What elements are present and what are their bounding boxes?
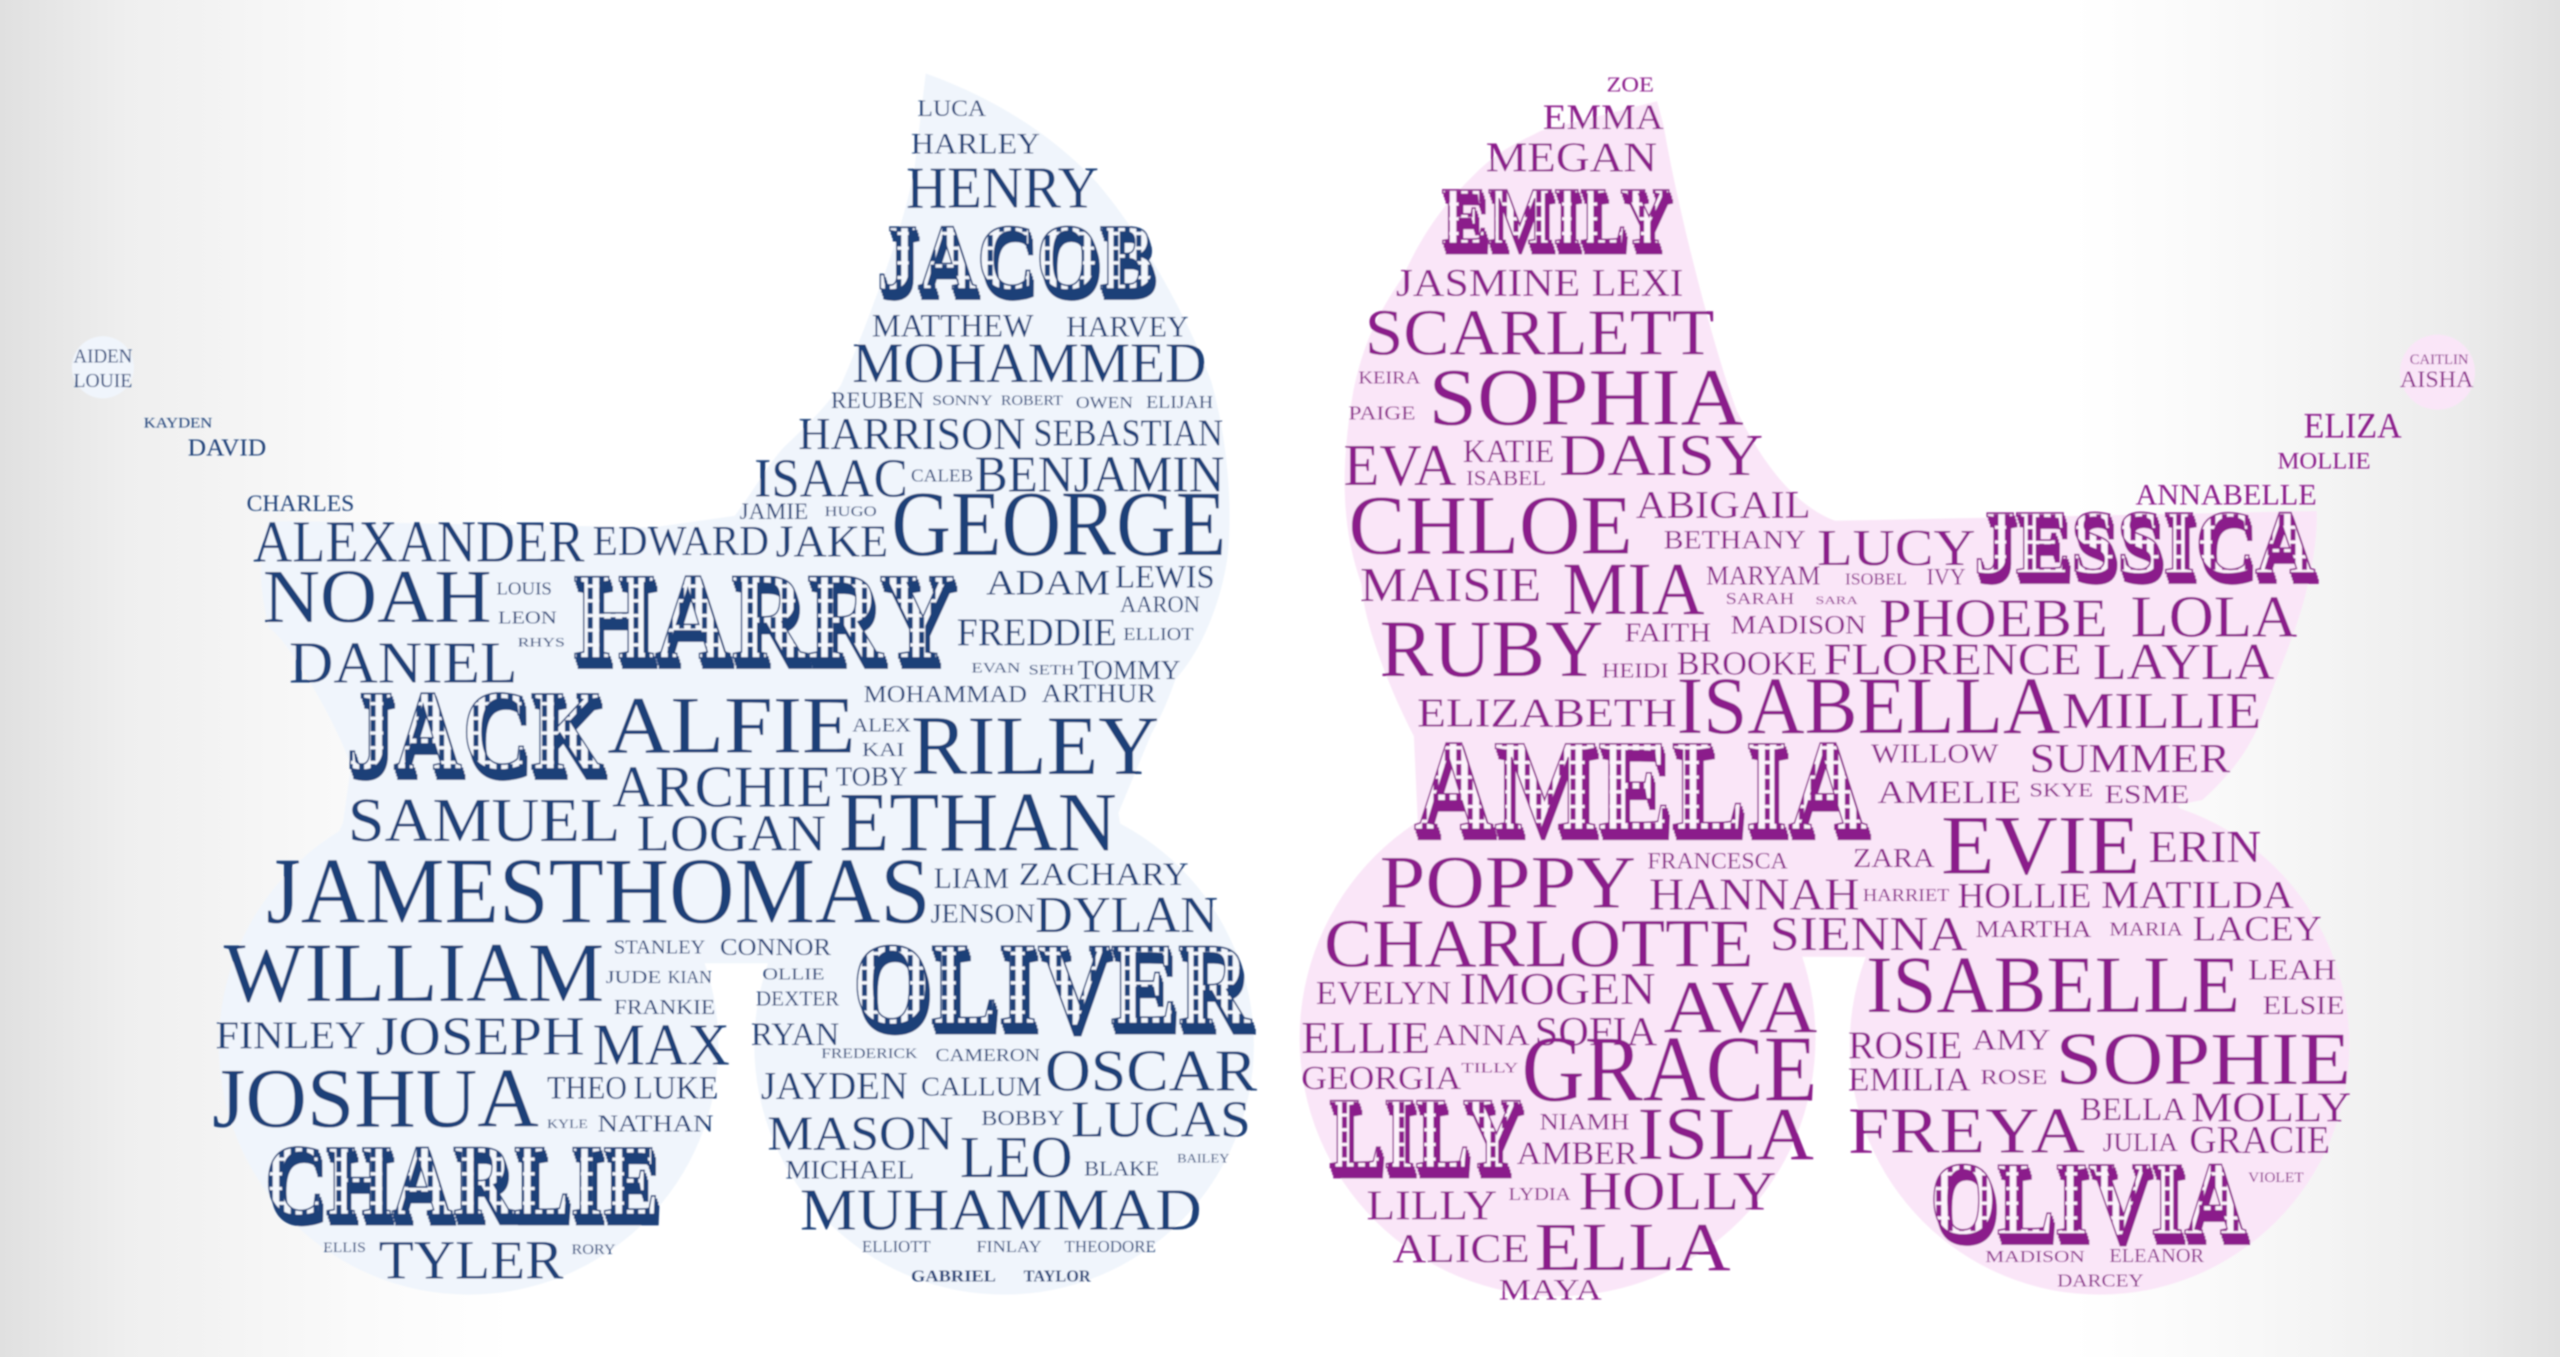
word cloud: girls names: ISABEL xyxy=(1466,466,1546,490)
word cloud: boys names: HARLEY xyxy=(911,128,1040,160)
word cloud: girls names: ELLA xyxy=(1535,1209,1731,1285)
word cloud: girls names: MARIA xyxy=(2109,919,2183,940)
word cloud: boys names: SAMUEL xyxy=(348,787,620,855)
word cloud: girls names: FLORENCE xyxy=(1824,633,2082,684)
word cloud: girls names: ERIN xyxy=(2149,821,2261,872)
word cloud: girls names: ISABELLA xyxy=(1677,660,2060,751)
ornamental boys names: HARRY xyxy=(573,547,955,685)
ornamental girls names: JESSICA xyxy=(1974,492,2315,593)
word cloud: girls names: ELEANOR xyxy=(2109,1246,2205,1267)
word cloud: girls names: FRANCESCA xyxy=(1647,849,1788,874)
word cloud: boys names: KYLE xyxy=(547,1116,588,1131)
word cloud: girls names: IMOGEN xyxy=(1460,963,1655,1014)
panel: boys pram silhouette xyxy=(72,73,1254,1295)
word cloud: boys names: KIAN xyxy=(668,967,712,987)
ornamental boys names: JACK xyxy=(346,667,604,794)
word cloud: girls names: ZARA xyxy=(1853,843,1935,874)
word cloud: girls names: FAITH xyxy=(1624,618,1711,649)
word cloud: boys names: OWEN xyxy=(1076,393,1133,412)
word cloud: boys names: RHYS xyxy=(518,635,565,650)
word cloud: girls names: ISOBEL xyxy=(1845,569,1907,588)
word cloud: boys names: ADAM xyxy=(986,562,1110,602)
word cloud: boys names: GABRIEL xyxy=(911,1267,996,1286)
word cloud: boys names: FINLEY xyxy=(216,1014,366,1057)
word cloud: boys names: FREDERICK xyxy=(821,1046,918,1062)
word cloud: girls names: LOLA xyxy=(2131,585,2298,650)
word cloud: boys names: NATHAN xyxy=(598,1110,714,1137)
word cloud: girls names: GEORGIA xyxy=(1301,1059,1461,1097)
word cloud: boys names: SONNY xyxy=(932,393,993,409)
word cloud: girls names: ELIZABETH xyxy=(1417,690,1677,735)
word cloud: boys names: HARVEY xyxy=(1066,311,1189,343)
word cloud: boys names: LIAM xyxy=(934,863,1009,895)
word cloud: girls names: GRACE xyxy=(1522,1017,1817,1121)
word cloud: boys names: CALLUM xyxy=(921,1071,1042,1102)
word cloud: boys names: AIDEN xyxy=(74,346,132,367)
word cloud: girls names: CAITLIN xyxy=(2410,352,2469,368)
word cloud: boys names: ALEXANDER xyxy=(253,510,585,575)
word cloud: boys names: THEODORE xyxy=(1064,1237,1156,1256)
word cloud: girls names: ABIGAIL xyxy=(1636,484,1811,527)
word cloud: boys names: CHARLES xyxy=(247,491,354,516)
word cloud: girls names: MADISON xyxy=(1731,610,1866,639)
word cloud: girls names: SARAH xyxy=(1726,589,1795,608)
word cloud: girls names: MILLIE xyxy=(2062,682,2261,740)
word cloud: girls names: DAISY xyxy=(1559,423,1763,488)
word cloud: girls names: NIAMH xyxy=(1540,1110,1629,1135)
word cloud: girls names: ELIZA xyxy=(2304,406,2402,446)
word cloud: girls names: HANNAH xyxy=(1649,868,1860,919)
word cloud: girls names: POPPY xyxy=(1380,842,1636,925)
word cloud: girls names: MATILDA xyxy=(2101,874,2294,917)
word cloud: boys names: ELLIOT xyxy=(1123,624,1194,644)
word cloud: boys names: DANIEL xyxy=(289,630,518,695)
word cloud: boys names: RILEY xyxy=(911,699,1159,793)
word cloud: boys names: ISAAC xyxy=(754,448,908,509)
word cloud: boys names: LEWIS xyxy=(1115,560,1215,596)
word cloud: girls names: ROSE xyxy=(1980,1065,2047,1089)
word cloud: girls names: AVA xyxy=(1664,966,1817,1049)
word cloud: boys names: JOSHUA xyxy=(212,1051,539,1145)
word cloud: boys names: ROBERT xyxy=(1001,393,1063,409)
word cloud: boys names: HUGO xyxy=(825,504,877,520)
word cloud: boys names: EDWARD xyxy=(593,518,769,565)
word cloud: boys names: JOSEPH xyxy=(376,1007,585,1068)
word cloud: girls names: TILLY xyxy=(1461,1061,1519,1077)
word cloud: boys names: OLLIE xyxy=(762,965,825,984)
word cloud: boys names: MOHAMMAD xyxy=(864,681,1027,708)
word cloud: girls names: ISABELLE xyxy=(1866,939,2240,1030)
word cloud: girls names: GRACIE xyxy=(2189,1119,2330,1162)
word cloud: boys names: HARRISON xyxy=(798,408,1025,459)
word cloud: boys names: SETH xyxy=(1029,662,1075,678)
word cloud: boys names: STANLEY xyxy=(614,937,705,958)
word cloud: boys names: CALEB xyxy=(911,466,973,486)
word cloud: boys names: ZACHARY xyxy=(1019,857,1189,893)
ornamental girls names: LILY xyxy=(1329,1077,1522,1189)
word cloud: girls names: ANNA xyxy=(1433,1017,1530,1052)
word cloud: boys names: ARTHUR xyxy=(1042,679,1157,708)
word cloud: boys names: REUBEN xyxy=(831,388,924,413)
word cloud: boys names: FRANKIE xyxy=(614,995,715,1019)
word cloud: boys names: KAYDEN xyxy=(144,416,213,432)
word cloud: girls names: ROSIE xyxy=(1848,1024,1962,1067)
word cloud: boys names: FINLAY xyxy=(976,1237,1042,1256)
word cloud: boys names: BOBBY xyxy=(981,1106,1064,1130)
word cloud: girls names: ELLIE xyxy=(1301,1012,1430,1063)
ornamental girls names: EMILY xyxy=(1442,170,1670,261)
ornamental boys names xyxy=(265,206,1252,1237)
word cloud: boys names: BAILEY xyxy=(1177,1150,1230,1165)
word cloud: girls names: ESME xyxy=(2104,780,2189,809)
word cloud: girls names: LILLY xyxy=(1367,1183,1497,1230)
word cloud: boys names: ALFIE xyxy=(607,680,856,771)
word cloud: girls names: MIA xyxy=(1562,548,1704,631)
ornamental girls names xyxy=(1329,170,2315,1257)
word cloud: girls names: EVIE xyxy=(1941,798,2140,892)
word cloud: girls names: JASMINE xyxy=(1396,261,1580,304)
word cloud: boys names: LEO xyxy=(960,1125,1073,1190)
word cloud: girls names: PAIGE xyxy=(1349,404,1416,425)
word cloud: boys names: LUKE xyxy=(633,1071,718,1107)
word cloud: boys names: JAKE xyxy=(776,516,888,567)
word cloud: boys names: LOGAN xyxy=(637,805,826,863)
word cloud: girls names: LEAH xyxy=(2248,955,2336,987)
word cloud: girls names: ELSIE xyxy=(2263,991,2344,1020)
ornamental girls names: OLIVIA xyxy=(1930,1141,2246,1257)
word cloud: girls names: EMMA xyxy=(1543,97,1664,137)
word cloud: girls names: SOPHIA xyxy=(1429,351,1744,442)
word cloud: girls names: HEIDI xyxy=(1602,659,1669,683)
word cloud: boys names: MATTHEW xyxy=(872,308,1034,344)
word cloud: girls names: KEIRA xyxy=(1358,368,1420,388)
word cloud: boys names: LOUIS xyxy=(496,578,552,598)
word cloud: girls names: BROOKE xyxy=(1677,644,1817,682)
word cloud: girls names: LAYLA xyxy=(2093,633,2275,691)
word cloud: boys names: CAMERON xyxy=(936,1045,1040,1065)
word cloud: girls names: ZOE xyxy=(1607,72,1654,96)
ornamental boys names: CHARLIE xyxy=(265,1125,660,1237)
word cloud: boys names: JAMES xyxy=(266,839,549,943)
word cloud: girls names: CHLOE xyxy=(1349,478,1633,572)
word cloud: boys names: ELIJAH xyxy=(1146,392,1213,412)
word cloud: girls names: BETHANY xyxy=(1664,526,1806,555)
word cloud: boys names: CONNOR xyxy=(720,934,832,961)
panel: girls pram silhouette xyxy=(1300,101,2475,1296)
word cloud: girls names: LUCY xyxy=(1817,519,1975,577)
word cloud: boys names: FREDDIE xyxy=(957,611,1117,654)
word cloud: girls names: MEGAN xyxy=(1486,134,1657,181)
word cloud: girls names: SOFIA xyxy=(1535,1009,1658,1054)
word cloud: girls names: MADISON xyxy=(1985,1247,2085,1266)
word cloud: boys names: MICHAEL xyxy=(785,1156,914,1185)
word cloud: girls names: SUMMER xyxy=(2029,736,2231,781)
word cloud: girls names: AMY xyxy=(1972,1025,2051,1057)
word cloud: boys names: LEON xyxy=(498,608,557,628)
word cloud: boys names: NOAH xyxy=(263,554,491,639)
word cloud: boys names: LOUIE xyxy=(74,371,132,392)
word cloud: boys names: RYAN xyxy=(751,1017,839,1053)
word cloud: girls names: HOLLY xyxy=(1579,1162,1776,1223)
word cloud: girls names: HARRIET xyxy=(1863,885,1949,905)
word cloud: girls names: SOPHIE xyxy=(2055,1018,2351,1101)
word cloud: boys names: MAX xyxy=(593,1012,730,1077)
word cloud: boys names: GEORGE xyxy=(891,473,1226,576)
word cloud: boys names: MASON xyxy=(767,1105,953,1160)
word cloud: girls names: VIOLET xyxy=(2248,1170,2304,1186)
word cloud: boys names: JUDE xyxy=(606,967,661,987)
word cloud: girls names: SIENNA xyxy=(1770,906,1967,961)
word cloud: girls names: MOLLY xyxy=(2191,1085,2351,1132)
word cloud: girls names: HOLLIE xyxy=(1958,876,2091,916)
ornamental boys names: OLIVER xyxy=(852,920,1252,1050)
word cloud: boys names: HENRY xyxy=(906,155,1099,220)
word cloud: boys names: ELLIS xyxy=(323,1240,366,1256)
word cloud: boys names: LUCAS xyxy=(1071,1090,1251,1148)
word cloud: girls names: JULIA xyxy=(2103,1128,2178,1157)
word cloud: girls names: PHOEBE xyxy=(1879,589,2108,650)
word cloud: girls names: CHARLOTTE xyxy=(1324,905,1753,981)
word cloud: boys names: BLAKE xyxy=(1084,1156,1159,1180)
word cloud: boys names: BENJAMIN xyxy=(975,445,1224,503)
word cloud: girls names: MARTHA xyxy=(1975,916,2092,943)
word cloud: boys names: ARCHIE xyxy=(612,754,833,819)
word cloud: girls names: RUBY xyxy=(1380,603,1603,694)
word cloud: girls names: SARA xyxy=(1815,595,1859,607)
word cloud: girls names: ISLA xyxy=(1638,1093,1814,1176)
word cloud: boys names: MOHAMMED xyxy=(852,332,1207,395)
word cloud: girls names: LACEY xyxy=(2193,908,2322,948)
word cloud: boys names: DEXTER xyxy=(756,987,840,1011)
word cloud: girls names: SCARLETT xyxy=(1365,297,1714,369)
word cloud: boys names: JAMIE xyxy=(740,499,808,524)
word cloud: boys names: RORY xyxy=(571,1242,616,1258)
word cloud: girls names: ALICE xyxy=(1393,1226,1530,1271)
word cloud: girls names: AMBER xyxy=(1517,1136,1638,1172)
word cloud: boys names: TAYLOR xyxy=(1024,1267,1091,1286)
word cloud: boys names: JENSON xyxy=(931,898,1035,929)
word cloud: girls names: LEXI xyxy=(1592,261,1683,304)
word cloud: girls names: EVA xyxy=(1344,433,1457,498)
word cloud: boys names: ETHAN xyxy=(839,776,1117,870)
word cloud: girls names: MAISIE xyxy=(1360,557,1541,612)
ornamental girls names: AMELIA xyxy=(1414,714,1868,858)
word cloud: boys names: DAVID xyxy=(188,434,266,461)
word cloud: boys names: WILLIAM xyxy=(224,926,604,1020)
word cloud: boys names: THOMAS xyxy=(549,839,931,943)
ornamental boys names: JACOB xyxy=(877,206,1154,310)
word cloud: girls names: MARYAM xyxy=(1706,560,1820,591)
word cloud: girls names: SKYE xyxy=(2029,781,2093,802)
word cloud: boys names: DYLAN xyxy=(1035,886,1218,944)
word cloud: girls names: IVY xyxy=(1927,564,1966,589)
word cloud: girls names xyxy=(1301,72,2474,1307)
word cloud: girls names: WILLOW xyxy=(1871,738,1999,769)
word cloud: boys names: TYLER xyxy=(379,1230,563,1291)
word cloud: girls names: BELLA xyxy=(2080,1092,2186,1128)
word cloud: boys names: AARON xyxy=(1120,592,1200,617)
word cloud: girls names: DARCEY xyxy=(2057,1270,2144,1290)
word cloud: girls names: MAYA xyxy=(1499,1275,1602,1307)
word cloud: boys names: THEO xyxy=(547,1071,627,1107)
word cloud: boys names xyxy=(74,96,1258,1291)
word cloud: boys names: SEBASTIAN xyxy=(1033,414,1223,455)
word cloud: boys names: KAI xyxy=(862,740,905,761)
word cloud: girls names: LYDIA xyxy=(1509,1184,1571,1204)
word cloud: boys names: LUCA xyxy=(918,96,987,121)
word cloud: girls names: AMELIE xyxy=(1878,775,2021,811)
word cloud: girls names: KATIE xyxy=(1463,434,1554,470)
word cloud: boys names: ELLIOTT xyxy=(862,1237,931,1256)
word cloud: girls names: EMILIA xyxy=(1848,1061,1971,1099)
word cloud: boys names: OSCAR xyxy=(1045,1039,1258,1104)
word cloud: boys names: ALEX xyxy=(852,715,911,736)
word cloud: girls names: MOLLIE xyxy=(2278,449,2371,474)
word cloud: girls names: EVELYN xyxy=(1316,974,1451,1012)
word cloud: girls names: FREYA xyxy=(1848,1096,2085,1168)
word cloud: boys names: MUHAMMAD xyxy=(800,1177,1202,1242)
word cloud: boys names: TOMMY xyxy=(1078,655,1180,686)
word cloud: girls names: ANNABELLE xyxy=(2135,479,2317,511)
word cloud: girls names: AISHA xyxy=(2400,367,2474,392)
word cloud: boys names: TOBY xyxy=(836,761,908,792)
word cloud: boys names: EVAN xyxy=(971,661,1021,677)
word cloud: boys names: JAYDEN xyxy=(761,1065,908,1108)
